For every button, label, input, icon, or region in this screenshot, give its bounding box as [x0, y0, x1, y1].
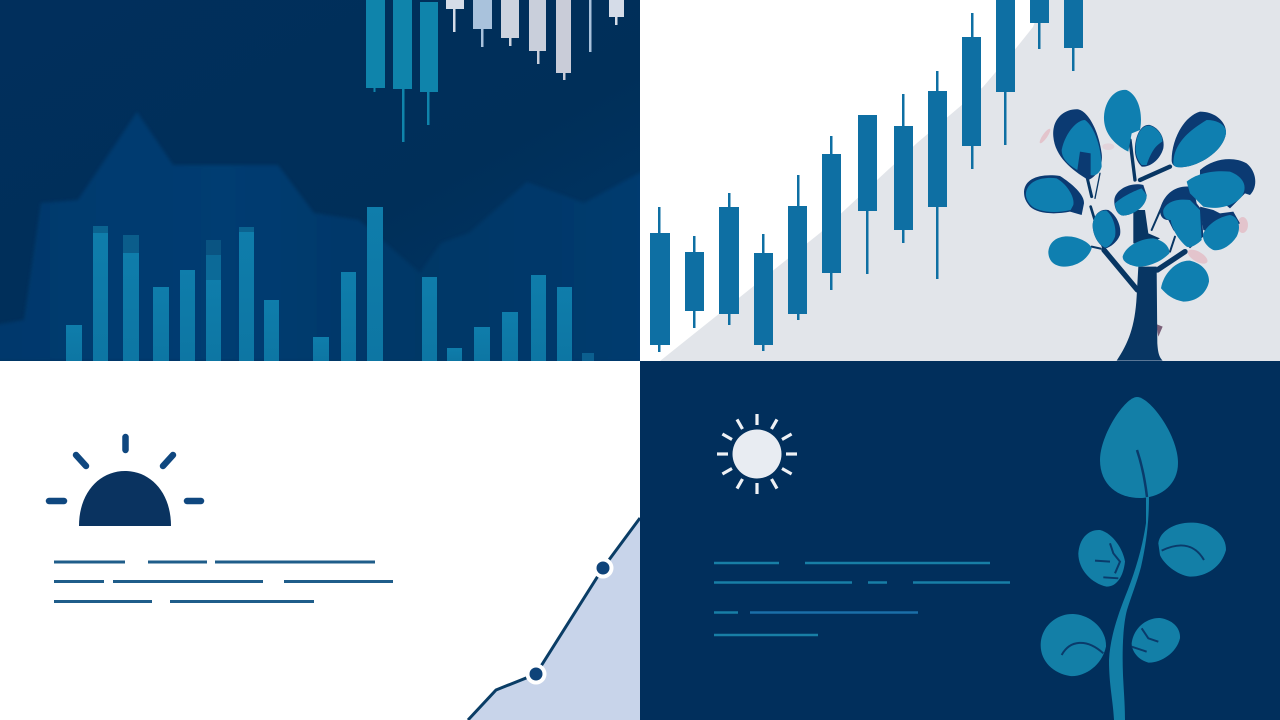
placeholder text lines	[54, 562, 393, 602]
icon: sun with rays	[717, 414, 797, 494]
icon: tree	[1024, 90, 1255, 361]
rising grey backdrop	[660, 0, 1280, 361]
panel: bottom-right sun and plant	[640, 361, 1280, 720]
icon: plant	[1041, 397, 1226, 720]
data point	[526, 664, 546, 684]
icon: rising sun	[49, 437, 201, 526]
trunk and branches	[1087, 140, 1185, 290]
candlestick chart	[650, 0, 1083, 352]
panel: bottom-left sunrise with area chart	[0, 361, 640, 720]
bar chart	[66, 207, 594, 361]
panel: top-right candlestick chart and tree	[640, 0, 1280, 361]
data point	[592, 558, 614, 578]
area line chart	[468, 518, 640, 720]
pink accents	[1038, 128, 1248, 266]
area silhouette	[0, 112, 645, 361]
leaves	[1024, 90, 1255, 302]
panel: top-left dark chart	[0, 0, 645, 361]
hanging candlesticks	[366, 0, 624, 142]
placeholder text lines	[714, 563, 1010, 635]
